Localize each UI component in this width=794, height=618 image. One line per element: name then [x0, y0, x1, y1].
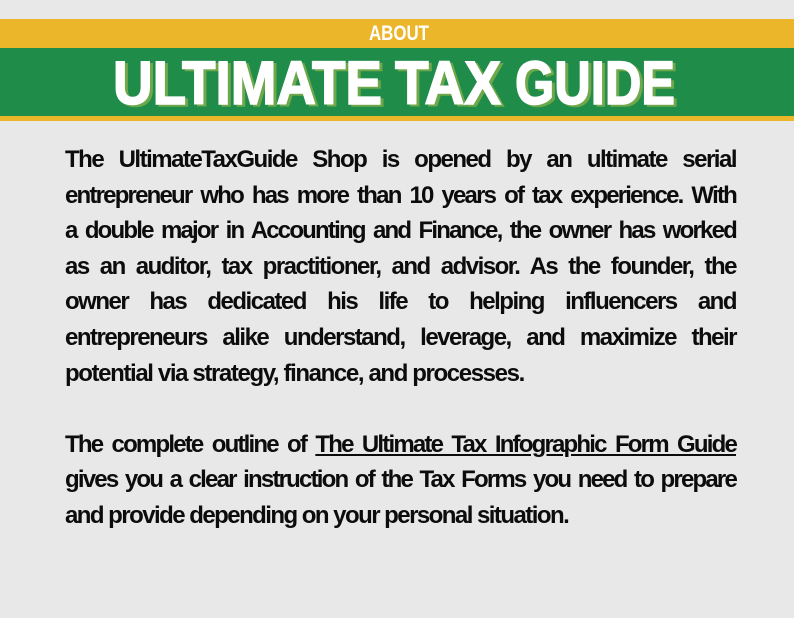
- paragraph: about the owner: owner has dedicated his life to helping influencers and: [65, 288, 736, 315]
- paragraph: about the owner: The UltimateTaxGuide Shop is opened by an ultimate serial: [65, 146, 736, 173]
- paragraph: about the owner: as an auditor, tax practitioner, and advisor. As the founder, the: [65, 253, 736, 280]
- paragraph: about the owner: entrepreneurs alike understand, leverage, and maximize their: [65, 324, 736, 351]
- paragraph: form guide outline: The complete outline of The Ultimate Tax Infographic Form Guide: [65, 431, 736, 458]
- paragraph: form guide outline: gives you a clear instruction of the Tax Forms you need to prepare: [65, 466, 736, 493]
- paragraph: about the owner: [65, 146, 738, 387]
- title: ultimate tax guide: GUIDE: [515, 49, 675, 117]
- paragraph: about the owner: a double major in Accounting and Finance, the owner has worked: [65, 217, 736, 244]
- paragraph: form guide outline: and provide depending on your personal situation.: [65, 502, 568, 529]
- title: ultimate tax guide: GUIDE: [518, 51, 678, 119]
- label: about: ABOUT: [369, 22, 429, 45]
- title: ultimate tax guide: ULTIMATE: [116, 51, 385, 119]
- header text: [113, 22, 678, 119]
- title: ultimate tax guide: ULTIMATE: [113, 49, 382, 117]
- paragraph: form guide outline: [65, 431, 737, 529]
- paragraph: about the owner: entrepreneur who has more than 10 years of tax experience. With: [65, 182, 736, 209]
- green title band: [0, 48, 794, 116]
- title: ultimate tax guide: [113, 49, 678, 119]
- header banner: [0, 19, 794, 121]
- title: ultimate tax guide: TAX: [395, 49, 501, 117]
- title: ultimate tax guide: TAX: [398, 51, 504, 119]
- paragraph: about the owner: potential via strategy, finance, and processes.: [65, 360, 524, 387]
